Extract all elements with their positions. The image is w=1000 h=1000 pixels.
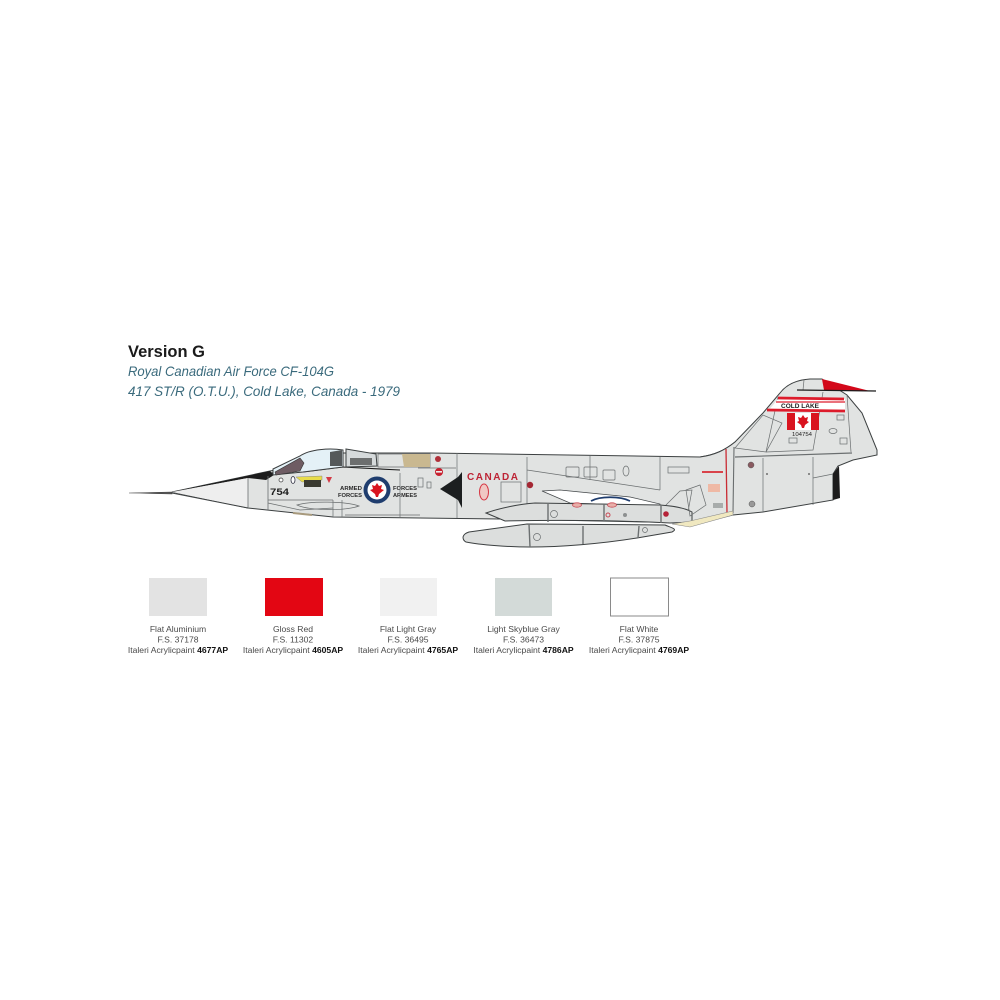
exhaust nozzle black — [833, 466, 840, 500]
colour swatch: Gloss Red: Italeri Acrylicpaint 4605AP — [243, 645, 343, 655]
tail panels — [702, 447, 833, 513]
colour swatch: Light Skyblue Gray: Italeri Acrylicpaint 4786AP — [473, 645, 574, 655]
colour swatch: Flat Aluminium: Flat Aluminium — [150, 624, 206, 634]
colour swatch: Light Skyblue Gray — [473, 578, 574, 655]
COLD LAKE band — [767, 398, 845, 411]
canopy — [273, 449, 430, 475]
colour swatch: Flat Aluminium: Italeri Acrylicpaint 4677AP — [128, 645, 228, 655]
colour swatch: Flat White: Italeri Acrylicpaint 4769AP — [589, 645, 689, 655]
wing — [542, 490, 692, 512]
colour swatch: Flat Light Gray: Italeri Acrylicpaint 4765AP — [358, 645, 458, 655]
nose markings: 754 — [270, 487, 290, 498]
nose markings — [268, 476, 420, 517]
colour swatch: Gloss Red — [243, 578, 343, 655]
heading: version title: 417 ST/R (O.T.U.), Cold Lake, Canada - 1979 — [128, 383, 400, 399]
roundel with ARMED FORCES text: ARMED — [340, 486, 362, 492]
colour swatch: Flat Aluminium — [128, 578, 228, 655]
COLD LAKE band: COLD LAKE — [781, 403, 820, 410]
colour swatch: Gloss Red: F.S. 11302 — [273, 634, 313, 644]
CANADA lettering and crest: CANADA — [467, 472, 518, 483]
roundel with ARMED FORCES text: FORCES — [338, 493, 362, 499]
fin tip red — [822, 379, 870, 391]
pitot probe — [129, 492, 172, 494]
aircraft side view illustration — [129, 379, 877, 547]
wingtip tank — [486, 503, 692, 523]
nose radome black wedge — [172, 471, 274, 492]
roundel with ARMED FORCES text: ARMEES — [393, 493, 417, 499]
mid fuselage panels — [400, 453, 689, 520]
CANADA lettering and crest — [467, 472, 518, 500]
heading: version title: Version G — [128, 343, 205, 361]
colour swatch: Flat Light Gray: Flat Light Gray — [380, 624, 437, 634]
Canadian flag — [787, 413, 819, 430]
rear underside details — [672, 511, 733, 527]
fin and rudder — [700, 379, 877, 515]
colour swatch: Light Skyblue Gray: F.S. 36473 — [503, 634, 544, 644]
colour swatch: Flat Aluminium: F.S. 37178 — [157, 634, 199, 644]
colour swatch: Flat White: F.S. 37875 — [618, 634, 660, 644]
underwing pylon tank — [463, 524, 674, 547]
heading: version title — [128, 343, 400, 399]
colour swatch: Flat Light Gray — [358, 578, 458, 655]
roundel with ARMED FORCES text — [338, 476, 417, 504]
colour swatch: Gloss Red: Gloss Red — [273, 624, 313, 634]
colour swatch: Flat White: Flat White — [620, 624, 659, 634]
colour swatch: Flat White — [589, 578, 689, 655]
intake shock cone — [440, 472, 462, 508]
fuselage — [172, 442, 735, 523]
fin and rudder: 104754 — [792, 432, 812, 438]
colour swatch: Flat Light Gray: F.S. 36495 — [387, 634, 429, 644]
roundel with ARMED FORCES text: FORCES — [393, 486, 417, 492]
colour swatch: Light Skyblue Gray: Light Skyblue Gray — [487, 624, 561, 634]
heading: version title: Royal Canadian Air Force CF-104G — [128, 363, 334, 379]
